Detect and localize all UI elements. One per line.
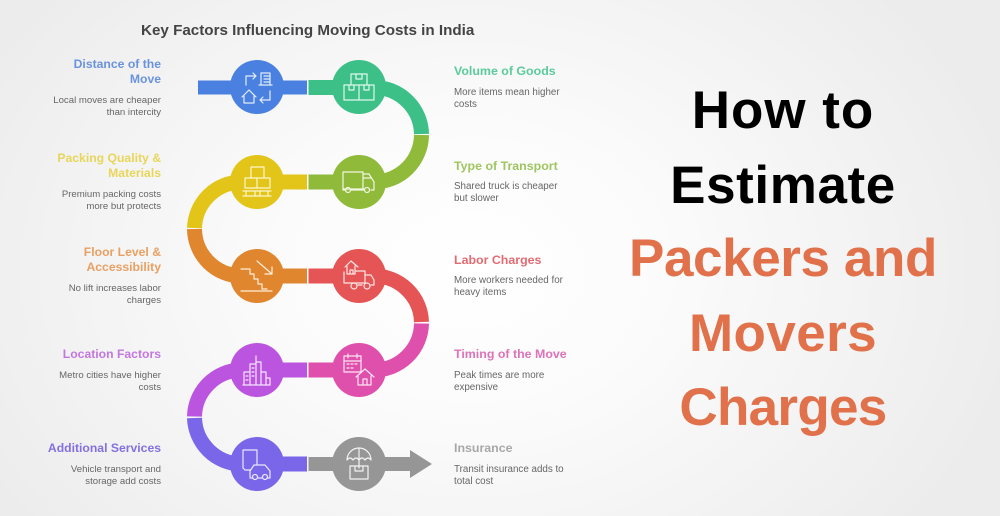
label: Floor Level & Accessibility: No lift increases labor — [69, 283, 161, 294]
icon: stacked boxes — [344, 74, 374, 100]
heading: How to Estimate: How to — [692, 81, 874, 140]
segment: transport — [308, 135, 422, 209]
heading: Packers and Movers Charges — [629, 229, 937, 437]
label: Labor Charges — [454, 253, 563, 298]
label: Insurance: Transit insurance adds to — [454, 464, 564, 475]
label: Floor Level & Accessibility — [69, 245, 161, 306]
label: Volume of Goods: Volume of Goods — [454, 64, 556, 78]
label: Location Factors: Location Factors — [63, 347, 161, 361]
title: Key Factors Influencing Moving Costs in India — [141, 22, 474, 39]
heading: Packers and Movers Charges: Movers — [689, 304, 877, 363]
label: Labor Charges: More workers needed for — [454, 275, 563, 286]
label: Type of Transport: but slower — [454, 193, 499, 204]
icon: boxes on pallet — [243, 167, 271, 196]
segment: timing — [308, 324, 422, 397]
label: Floor Level & Accessibility: Accessibility — [86, 260, 161, 274]
label: Location Factors: costs — [139, 382, 161, 393]
label: Timing of the Move: Timing of the Move — [454, 347, 567, 361]
label: Packing Quality & Materials — [57, 151, 161, 212]
label: Type of Transport: Type of Transport — [454, 159, 558, 173]
label: Floor Level & Accessibility: Floor Level & — [84, 245, 161, 259]
label: Additional Services: Vehicle transport and — [71, 464, 161, 475]
label: Distance of the Move: Distance of the — [74, 57, 161, 71]
heading: Packers and Movers Charges: Charges — [679, 378, 887, 437]
icon: phone and car — [243, 450, 270, 480]
segment: volume — [308, 60, 422, 134]
label: Distance of the Move — [53, 57, 161, 118]
label: Type of Transport: Shared truck is cheaper — [454, 181, 557, 192]
label: Type of Transport — [454, 159, 558, 204]
label: Packing Quality & Materials: more but protects — [86, 201, 161, 212]
label: Insurance: total cost — [454, 476, 493, 487]
label: Volume of Goods: More items mean higher — [454, 87, 560, 98]
label: Packing Quality & Materials: Materials — [108, 166, 161, 180]
label: Distance of the Move: Local moves are cheaper — [53, 95, 161, 106]
segment: additional services — [194, 418, 307, 491]
heading: Packers and Movers Charges: Packers and — [629, 229, 937, 288]
heading: How to Estimate: Estimate — [670, 156, 896, 215]
label: Packing Quality & Materials: Packing Quality & — [57, 151, 161, 165]
label: Additional Services: Additional Services — [48, 441, 161, 455]
icon: stairs with down arrow — [241, 261, 272, 291]
label: Floor Level & Accessibility: charges — [127, 295, 161, 306]
label: Insurance: Insurance — [454, 441, 513, 455]
segment: location — [194, 343, 307, 416]
segment: packing — [194, 155, 307, 228]
label: Volume of Goods — [454, 64, 560, 110]
icon: home and truck — [344, 261, 374, 289]
icon: route between building and home — [242, 73, 272, 103]
label: Location Factors — [59, 347, 161, 393]
label: Labor Charges: Labor Charges — [454, 253, 541, 267]
label: Timing of the Move: Peak times are more — [454, 370, 544, 381]
segment: distance — [198, 60, 307, 114]
segment: insurance arrow — [308, 437, 432, 491]
icon: calendar and home — [344, 354, 374, 385]
label: Volume of Goods: costs — [454, 99, 477, 110]
icon: city buildings — [243, 356, 270, 385]
icon: umbrella over box — [347, 448, 371, 479]
label: Additional Services — [48, 441, 161, 487]
segment: floor — [194, 229, 307, 303]
label: Insurance — [454, 441, 564, 487]
heading: How to Estimate — [670, 81, 896, 215]
label: Packing Quality & Materials: Premium packing costs — [62, 189, 161, 200]
label: Distance of the Move: than intercity — [107, 107, 161, 118]
label: Timing of the Move: expensive — [454, 382, 498, 393]
label: Distance of the Move: Move — [130, 72, 161, 86]
icon: delivery truck — [343, 172, 374, 192]
label: Labor Charges: heavy items — [454, 287, 506, 298]
segment: labor — [308, 249, 422, 322]
label: Additional Services: storage add costs — [85, 476, 161, 487]
label: Timing of the Move — [454, 347, 567, 393]
label: Location Factors: Metro cities have higher — [59, 370, 161, 381]
